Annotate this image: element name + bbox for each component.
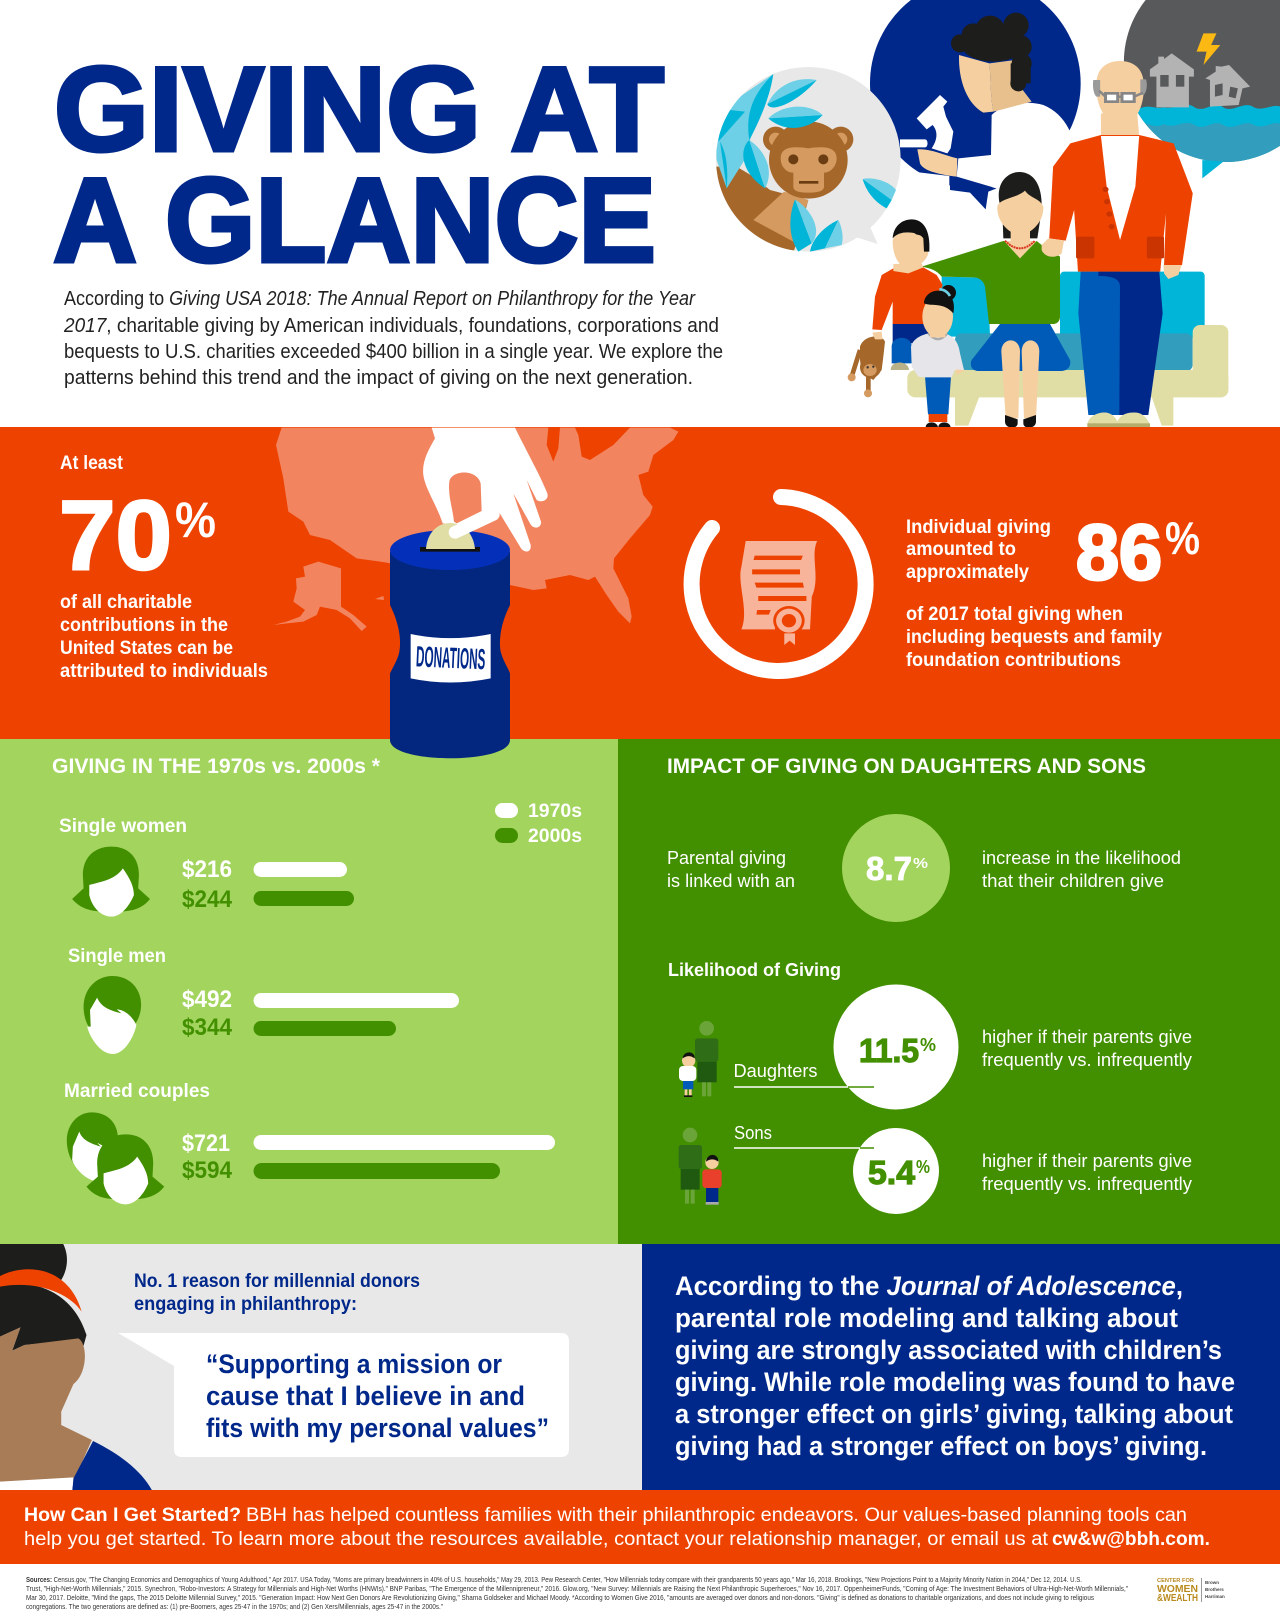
stat: sons 5.4 percent — [679, 1122, 1193, 1214]
icon: couple heads — [67, 1112, 164, 1204]
stat: sons 5.4 percent: 5.4 — [868, 1154, 916, 1191]
speech bubble quote — [118, 1333, 569, 1457]
girl — [911, 285, 965, 427]
toy monkey — [848, 332, 885, 397]
panel: call to action footer: How Can I Get Started? — [24, 1505, 241, 1526]
speech bubble quote: cause that I believe in and — [206, 1381, 525, 1411]
panel: dark green impact — [618, 739, 1280, 1244]
statistic: 70 percent: At least — [60, 453, 124, 474]
statistic: 86 percent: foundation contributions — [906, 650, 1121, 671]
monkey bubble — [716, 67, 901, 253]
statistic: 70 percent: contributions in the — [60, 615, 228, 636]
panel: call to action footer — [0, 1490, 1280, 1564]
intro text: 2017, charitable giving by American individuals, foundations, corporations and — [63, 315, 719, 337]
statistic: 70 percent: % — [175, 492, 216, 548]
legend: 2000s — [528, 826, 582, 847]
statistic: 70 percent: United States can be — [60, 638, 233, 659]
panel: journal of adolescence: giving are strongly associated with children’s — [675, 1335, 1222, 1365]
stat: daughters 11.5 percent: Daughters — [734, 1060, 818, 1081]
statistic: 86 percent: including bequests and family — [906, 627, 1162, 648]
panel: orange statistics band — [0, 427, 1280, 739]
group: single men: Single men — [68, 946, 166, 967]
illustration: US map, hand and donation can: DONATIONS — [415, 640, 486, 676]
statistic: 70 percent — [59, 453, 268, 682]
icon: certificate — [740, 541, 817, 645]
group: single women — [59, 816, 354, 917]
group: single women: $244 — [182, 886, 233, 913]
panel: journal of adolescence: a stronger effect on girls’ giving, talking about — [675, 1399, 1233, 1429]
heading: impact of giving: IMPACT OF GIVING ON DAUGHTERS AND SONS — [667, 755, 1146, 778]
panel: call to action footer: BBH has helped countless families with their philanthropic endeavors. Our values-based planning tools can — [246, 1505, 1187, 1526]
stat: daughters 11.5 percent: % — [920, 1035, 936, 1055]
subheading: likelihood of giving: Likelihood of Giving — [668, 959, 841, 980]
illustration: US map, hand and donation can — [273, 428, 678, 758]
stat: sons 5.4 percent: % — [916, 1157, 930, 1177]
panel: call to action footer: help you get started. To learn more about the resources available, contact your relationship manager, or email us at — [24, 1529, 1049, 1550]
statistic: 86 percent: approximately — [906, 562, 1029, 583]
intro text: bequests to U.S. charities exceeded $400 billion in a single year. We explore the — [64, 341, 723, 363]
icon: woman head — [72, 847, 150, 917]
panel: journal of adolescence — [642, 1244, 1280, 1490]
stat: sons 5.4 percent: higher if their parents give — [982, 1150, 1192, 1171]
stat: sons 5.4 percent: Sons — [734, 1122, 772, 1143]
scientist bubble — [870, 0, 1081, 209]
panel: light green giving comparison — [0, 739, 618, 1244]
group: single men: $492 — [182, 986, 232, 1013]
logo: center for women and wealth: Brothers — [1205, 1587, 1224, 1592]
stat: parental giving 8.7 percent: % — [913, 855, 928, 872]
panel: journal of adolescence: giving had a stronger effect on boys’ giving. — [675, 1431, 1207, 1461]
sources: Mar 30, 2017. Deloitte, "Mind the gaps, The 2015 Deloitte Millennial Survey," 2015. "Generation Impact: How Next Gen Donors Are Revolutionizing Giving," Sharna Goldseker and Michael Moody. *According to Women Give 2016, "amounts are averaged over donors and non-donors. "Giving" is defined as donations to charitable organizations, and does not include giving to religious — [26, 1593, 1094, 1602]
icon: man head — [84, 976, 141, 1054]
title — [53, 43, 664, 287]
statistic: 86 percent — [906, 508, 1200, 671]
stat: daughters 11.5 percent: frequently vs. infrequently — [982, 1049, 1193, 1070]
sources: congregations. The two generations are defined as: (1) pre-Boomers, ages 25-47 in the 1970s; and (2) Gen Xers/Millennials, ages 25-47 in the 2000s." — [26, 1602, 443, 1611]
mother — [922, 172, 1070, 428]
group: single men: $344 — [182, 1014, 233, 1041]
heading: reason: No. 1 reason for millennial donors — [134, 1271, 420, 1292]
stat: parental giving 8.7 percent: 8.7 — [866, 850, 912, 887]
statistic: 70 percent: attributed to individuals — [60, 661, 268, 682]
stat: sons 5.4 percent: frequently vs. infrequently — [982, 1173, 1193, 1194]
heading: giving comparison: GIVING IN THE 1970s vs. 2000s * — [52, 755, 381, 778]
panel: journal of adolescence: According to the Journal of Adolescence, — [675, 1271, 1183, 1301]
logo: center for women and wealth: WOMEN — [1157, 1583, 1198, 1595]
sofa — [907, 272, 1228, 426]
Alaska — [273, 562, 384, 631]
stat: parental giving 8.7 percent: is linked with an — [667, 870, 795, 891]
mother's hand on shoulder — [1042, 238, 1064, 257]
intro text: patterns behind this trend and the impact of giving on the next generation. — [64, 367, 693, 389]
group: married couples: $594 — [182, 1157, 233, 1184]
group: single men — [68, 946, 459, 1054]
legend — [495, 801, 582, 847]
stat: parental giving 8.7 percent: Parental giving — [667, 847, 786, 868]
intro text — [63, 288, 723, 389]
stat: parental giving 8.7 percent: that their children give — [982, 870, 1164, 891]
intro text: According to Giving USA 2018: The Annual Report on Philanthropy for the Year — [64, 288, 696, 310]
statistic: 70 percent: of all charitable — [60, 592, 192, 613]
stat: daughters 11.5 percent: higher if their parents give — [982, 1026, 1192, 1047]
sources — [26, 1575, 1128, 1611]
icon: parent and daughter — [679, 1021, 718, 1097]
statistic: 86 percent: Individual giving — [906, 517, 1051, 538]
illustration: woman speaking — [0, 1244, 152, 1490]
heading: reason: engaging in philanthropy: — [134, 1294, 357, 1315]
statistic: 86 percent: amounted to — [906, 539, 1016, 560]
grandfather — [1049, 61, 1193, 427]
illustration: family with thought bubbles — [716, 0, 1280, 428]
statistic: 70 percent: 70 — [59, 480, 172, 590]
boy — [872, 219, 943, 370]
progress ring with certificate icon — [692, 497, 866, 671]
hand — [423, 428, 548, 551]
panel: journal of adolescence: giving. While role modeling was found to have — [675, 1367, 1235, 1397]
panel: journal of adolescence: parental role modeling and talking about — [675, 1303, 1178, 1333]
stat: daughters 11.5 percent: 11.5 — [859, 1032, 919, 1069]
speech bubble quote: “Supporting a mission or — [206, 1349, 502, 1379]
title: A GLANCE — [53, 153, 656, 287]
logo: center for women and wealth: CENTER FOR — [1157, 1578, 1194, 1584]
panel: call to action footer: cw&w@bbh.com. — [1052, 1529, 1210, 1550]
title: GIVING AT — [54, 43, 664, 177]
donation can — [390, 530, 510, 758]
statistic: 86 percent: 86 — [1076, 508, 1162, 596]
legend: 1970s — [528, 801, 582, 822]
logo: center for women and wealth: &WEALTH — [1157, 1593, 1198, 1604]
group: married couples — [64, 1081, 555, 1204]
storm bubble — [1120, 0, 1280, 178]
group: single women: Single women — [59, 816, 187, 837]
stat: daughters 11.5 percent — [679, 984, 1193, 1110]
group: single women: $216 — [182, 856, 232, 883]
group: married couples: Married couples — [64, 1081, 210, 1102]
logo: center for women and wealth: Brown — [1205, 1580, 1219, 1585]
stat: parental giving 8.7 percent: increase in the likelihood — [982, 847, 1181, 868]
can label — [411, 634, 491, 682]
logo: center for women and wealth: Harriman — [1205, 1594, 1225, 1599]
speech bubble quote: fits with my personal values” — [206, 1413, 549, 1443]
statistic: 86 percent: of 2017 total giving when — [906, 604, 1123, 625]
icon: parent and son — [679, 1128, 722, 1205]
group: married couples: $721 — [182, 1130, 230, 1157]
stat: parental giving 8.7 percent — [667, 814, 1181, 922]
panel: millennial donors — [0, 1244, 642, 1490]
US map — [276, 428, 678, 623]
statistic: 86 percent: % — [1165, 512, 1200, 564]
logo: center for women and wealth — [1157, 1578, 1225, 1604]
heading: reason — [134, 1271, 420, 1315]
